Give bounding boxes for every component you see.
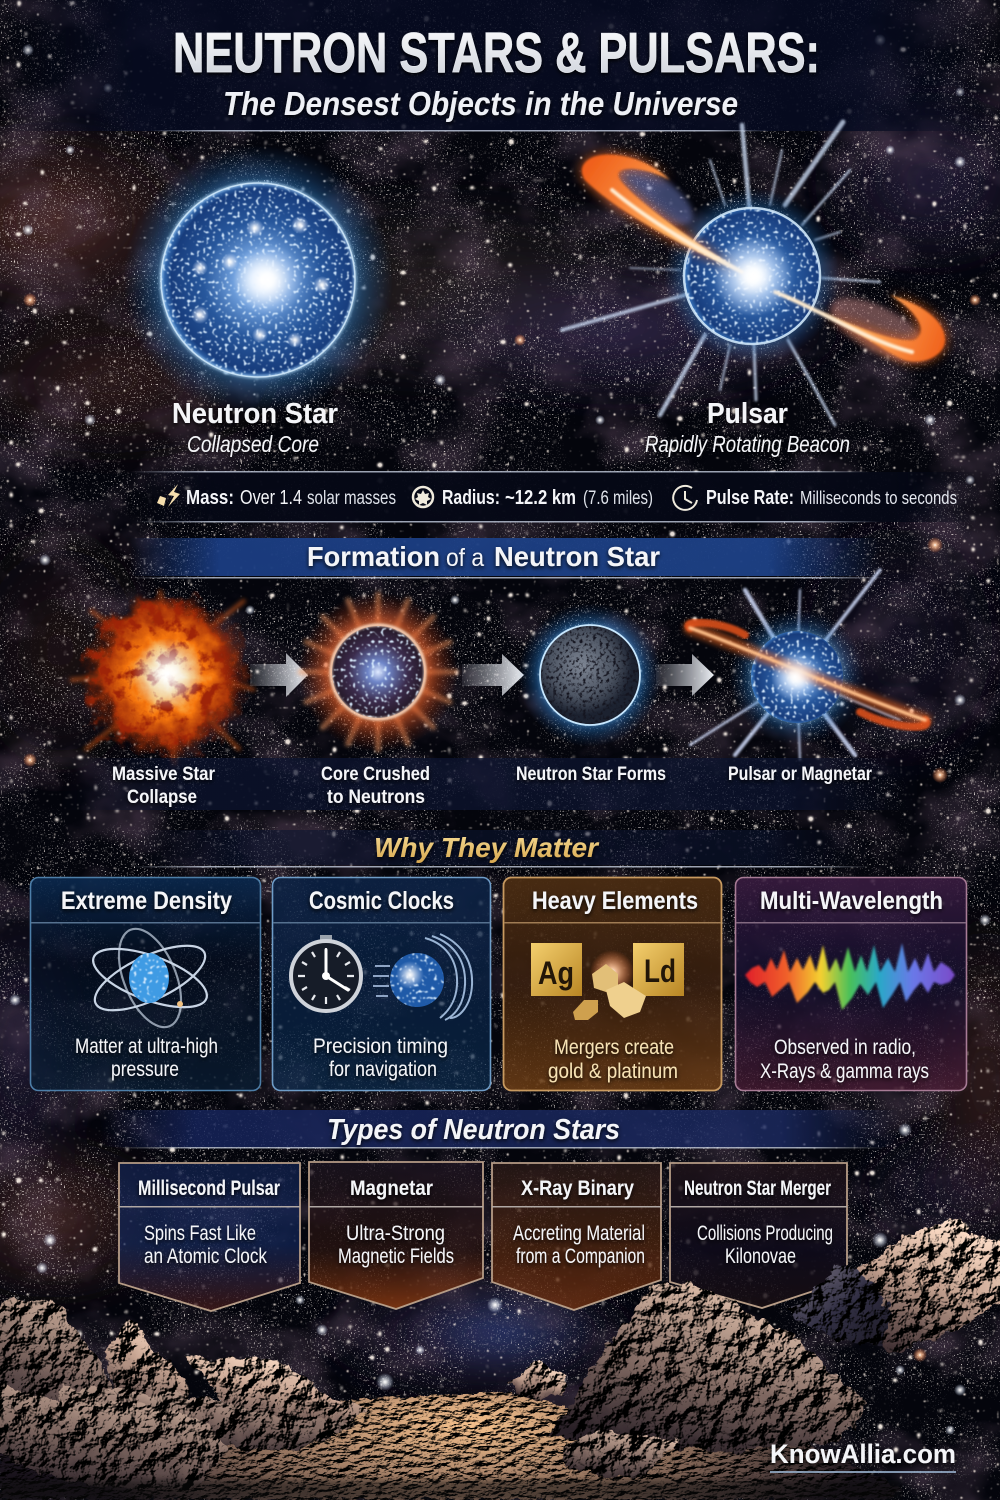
label: core crushed: Core Crushed: [321, 764, 430, 785]
section heading: formation: Formation: [307, 541, 440, 572]
stat: mass: [186, 487, 396, 509]
icon: stopwatch: [291, 935, 361, 1011]
subtitle: The Densest Objects in the Universe: [223, 85, 738, 122]
type card: neutron star merger: Collisions Producing: [697, 1222, 833, 1245]
text: gold & platinum: [548, 1060, 678, 1083]
stat: pulse rate: [706, 487, 957, 509]
formation labels: [60, 758, 920, 810]
type card: magnetar: Magnetic Fields: [338, 1245, 454, 1268]
stat: radius: (7.6 miles): [583, 488, 653, 509]
label: neutron star forms: Neutron Star Forms: [516, 764, 666, 785]
type card: magnetar: [309, 1162, 483, 1309]
text: [75, 1035, 218, 1081]
rocky ground: [0, 1218, 1000, 1500]
icon: clock: [673, 486, 697, 510]
section heading: why they matter: Why They Matter: [374, 832, 600, 863]
type card: neutron star merger: [670, 1163, 847, 1308]
stat: pulse rate: Milliseconds to seconds: [800, 488, 957, 508]
main heading: NEUTRON STARS & PULSARS:: [173, 21, 820, 85]
icon: radius: [413, 487, 433, 507]
illustration: neutron star: [123, 145, 393, 415]
shaded foreground: [0, 1480, 900, 1500]
stat: mass: Over 1.4: [240, 487, 302, 509]
card: cosmic clocks: [272, 878, 490, 1090]
stat: mass: Mass:: [186, 487, 234, 509]
card: multi-wavelength: Multi-Wavelength: [760, 887, 943, 915]
stat: pulse rate: Pulse Rate:: [706, 487, 794, 509]
type card: neutron star merger: Neutron Star Merger: [684, 1177, 831, 1200]
card: extreme density: Extreme Density: [61, 887, 232, 915]
icon: silver tile: [531, 943, 582, 996]
stat: radius: ~12.2 km: [505, 487, 576, 509]
card: multi-wavelength: [736, 878, 966, 1090]
formation step 3: neutron star forms: [518, 603, 662, 747]
arrow 3: [656, 654, 714, 696]
text: Mergers create: [554, 1036, 674, 1059]
icon: lead tile: Ld: [644, 953, 676, 989]
type card: neutron star merger: Kilonovae: [725, 1245, 796, 1268]
title: [173, 21, 820, 122]
label: pulsar or magnetar: Pulsar or Magnetar: [728, 764, 873, 785]
orange jet glow: [582, 155, 945, 361]
card: heavy elements: Heavy Elements: [532, 887, 698, 915]
arrow 1: [250, 653, 308, 697]
rocks: left cluster: [0, 1293, 365, 1490]
card: extreme density: [30, 878, 260, 1090]
section heading: why they matter: [130, 830, 870, 868]
type card: magnetar: Magnetar: [350, 1177, 433, 1200]
section heading: types of neutron stars: Types of Neutron Stars: [327, 1114, 620, 1146]
type card: millisecond pulsar: [119, 1163, 300, 1311]
arrow 2: [462, 654, 524, 696]
text: [313, 1035, 448, 1081]
label: neutron star: Collapsed Core: [187, 431, 319, 457]
brand footer: KnowAllia.com: [770, 1439, 956, 1469]
pulsar rays: [562, 122, 880, 425]
bright core clusters: [191, 216, 331, 348]
label: pulsar: Pulsar: [707, 398, 788, 430]
illustration: pulsar: [562, 122, 945, 425]
title panel: [0, 0, 1000, 132]
type card: x-ray binary: from a Companion: [516, 1245, 645, 1268]
section heading: formation: [130, 538, 890, 578]
section heading: formation: Neutron Star: [494, 541, 660, 572]
text: [760, 1036, 929, 1083]
card: heavy elements: [504, 878, 722, 1090]
type card: millisecond pulsar: Millisecond Pulsar: [138, 1177, 280, 1200]
rocks: right cluster front: [560, 1318, 870, 1480]
text: pressure: [111, 1058, 179, 1081]
card: cosmic clocks: Cosmic Clocks: [309, 887, 454, 915]
jet interior swirls: [593, 147, 939, 375]
icon: lead tile: [633, 943, 684, 996]
formation step 2: core crushed: [298, 592, 458, 752]
text: Precision timing: [313, 1035, 448, 1058]
label: neutron star: [172, 398, 338, 457]
section heading: types of neutron stars: [100, 1110, 900, 1148]
type card: x-ray binary: X-Ray Binary: [521, 1177, 634, 1200]
icon: gold nuggets: [573, 950, 646, 1020]
stat: radius: Radius:: [442, 487, 500, 509]
text: Matter at ultra-high: [75, 1035, 218, 1058]
type card: magnetar: Ultra-Strong: [346, 1222, 445, 1245]
icon: atom: [86, 920, 214, 1036]
rocks: right cluster back: [508, 1218, 1000, 1442]
text: Observed in radio,: [774, 1036, 916, 1059]
jet beam cores: [612, 190, 912, 352]
type card: millisecond pulsar: an Atomic Clock: [144, 1245, 267, 1268]
stat: mass: solar masses: [307, 488, 396, 509]
ground plain: [0, 1392, 905, 1500]
type card: x-ray binary: [492, 1163, 661, 1310]
formation step 4: pulsar or magnetar: [688, 570, 927, 760]
label: pulsar: Rapidly Rotating Beacon: [645, 431, 850, 457]
stats bar: [130, 471, 980, 522]
type card: millisecond pulsar: Spins Fast Like: [144, 1222, 256, 1245]
label: massive star collapse: [112, 764, 216, 808]
stat: radius: [442, 487, 653, 509]
label: core crushed: to Neutrons: [327, 787, 425, 808]
orange jets: [582, 155, 945, 361]
text: X-Rays & gamma rays: [760, 1060, 929, 1083]
formation step 1: massive star collapse: [70, 589, 255, 765]
label: massive star collapse: Collapse: [127, 787, 197, 808]
pulsar body: [664, 188, 840, 364]
icon: silver tile: Ag: [538, 955, 574, 991]
label: pulsar: [645, 398, 850, 457]
icon: pulsing star: [373, 934, 472, 1020]
icon: spectrum wave: [745, 943, 955, 1010]
label: neutron star: Neutron Star: [172, 398, 338, 430]
text: [548, 1036, 678, 1083]
type card: x-ray binary: Accreting Material: [513, 1222, 645, 1245]
label: core crushed: [321, 764, 430, 808]
label: massive star collapse: Massive Star: [112, 764, 216, 785]
icon: mass: [157, 484, 180, 507]
text: for navigation: [329, 1058, 437, 1081]
section heading: formation: of a: [446, 544, 484, 572]
